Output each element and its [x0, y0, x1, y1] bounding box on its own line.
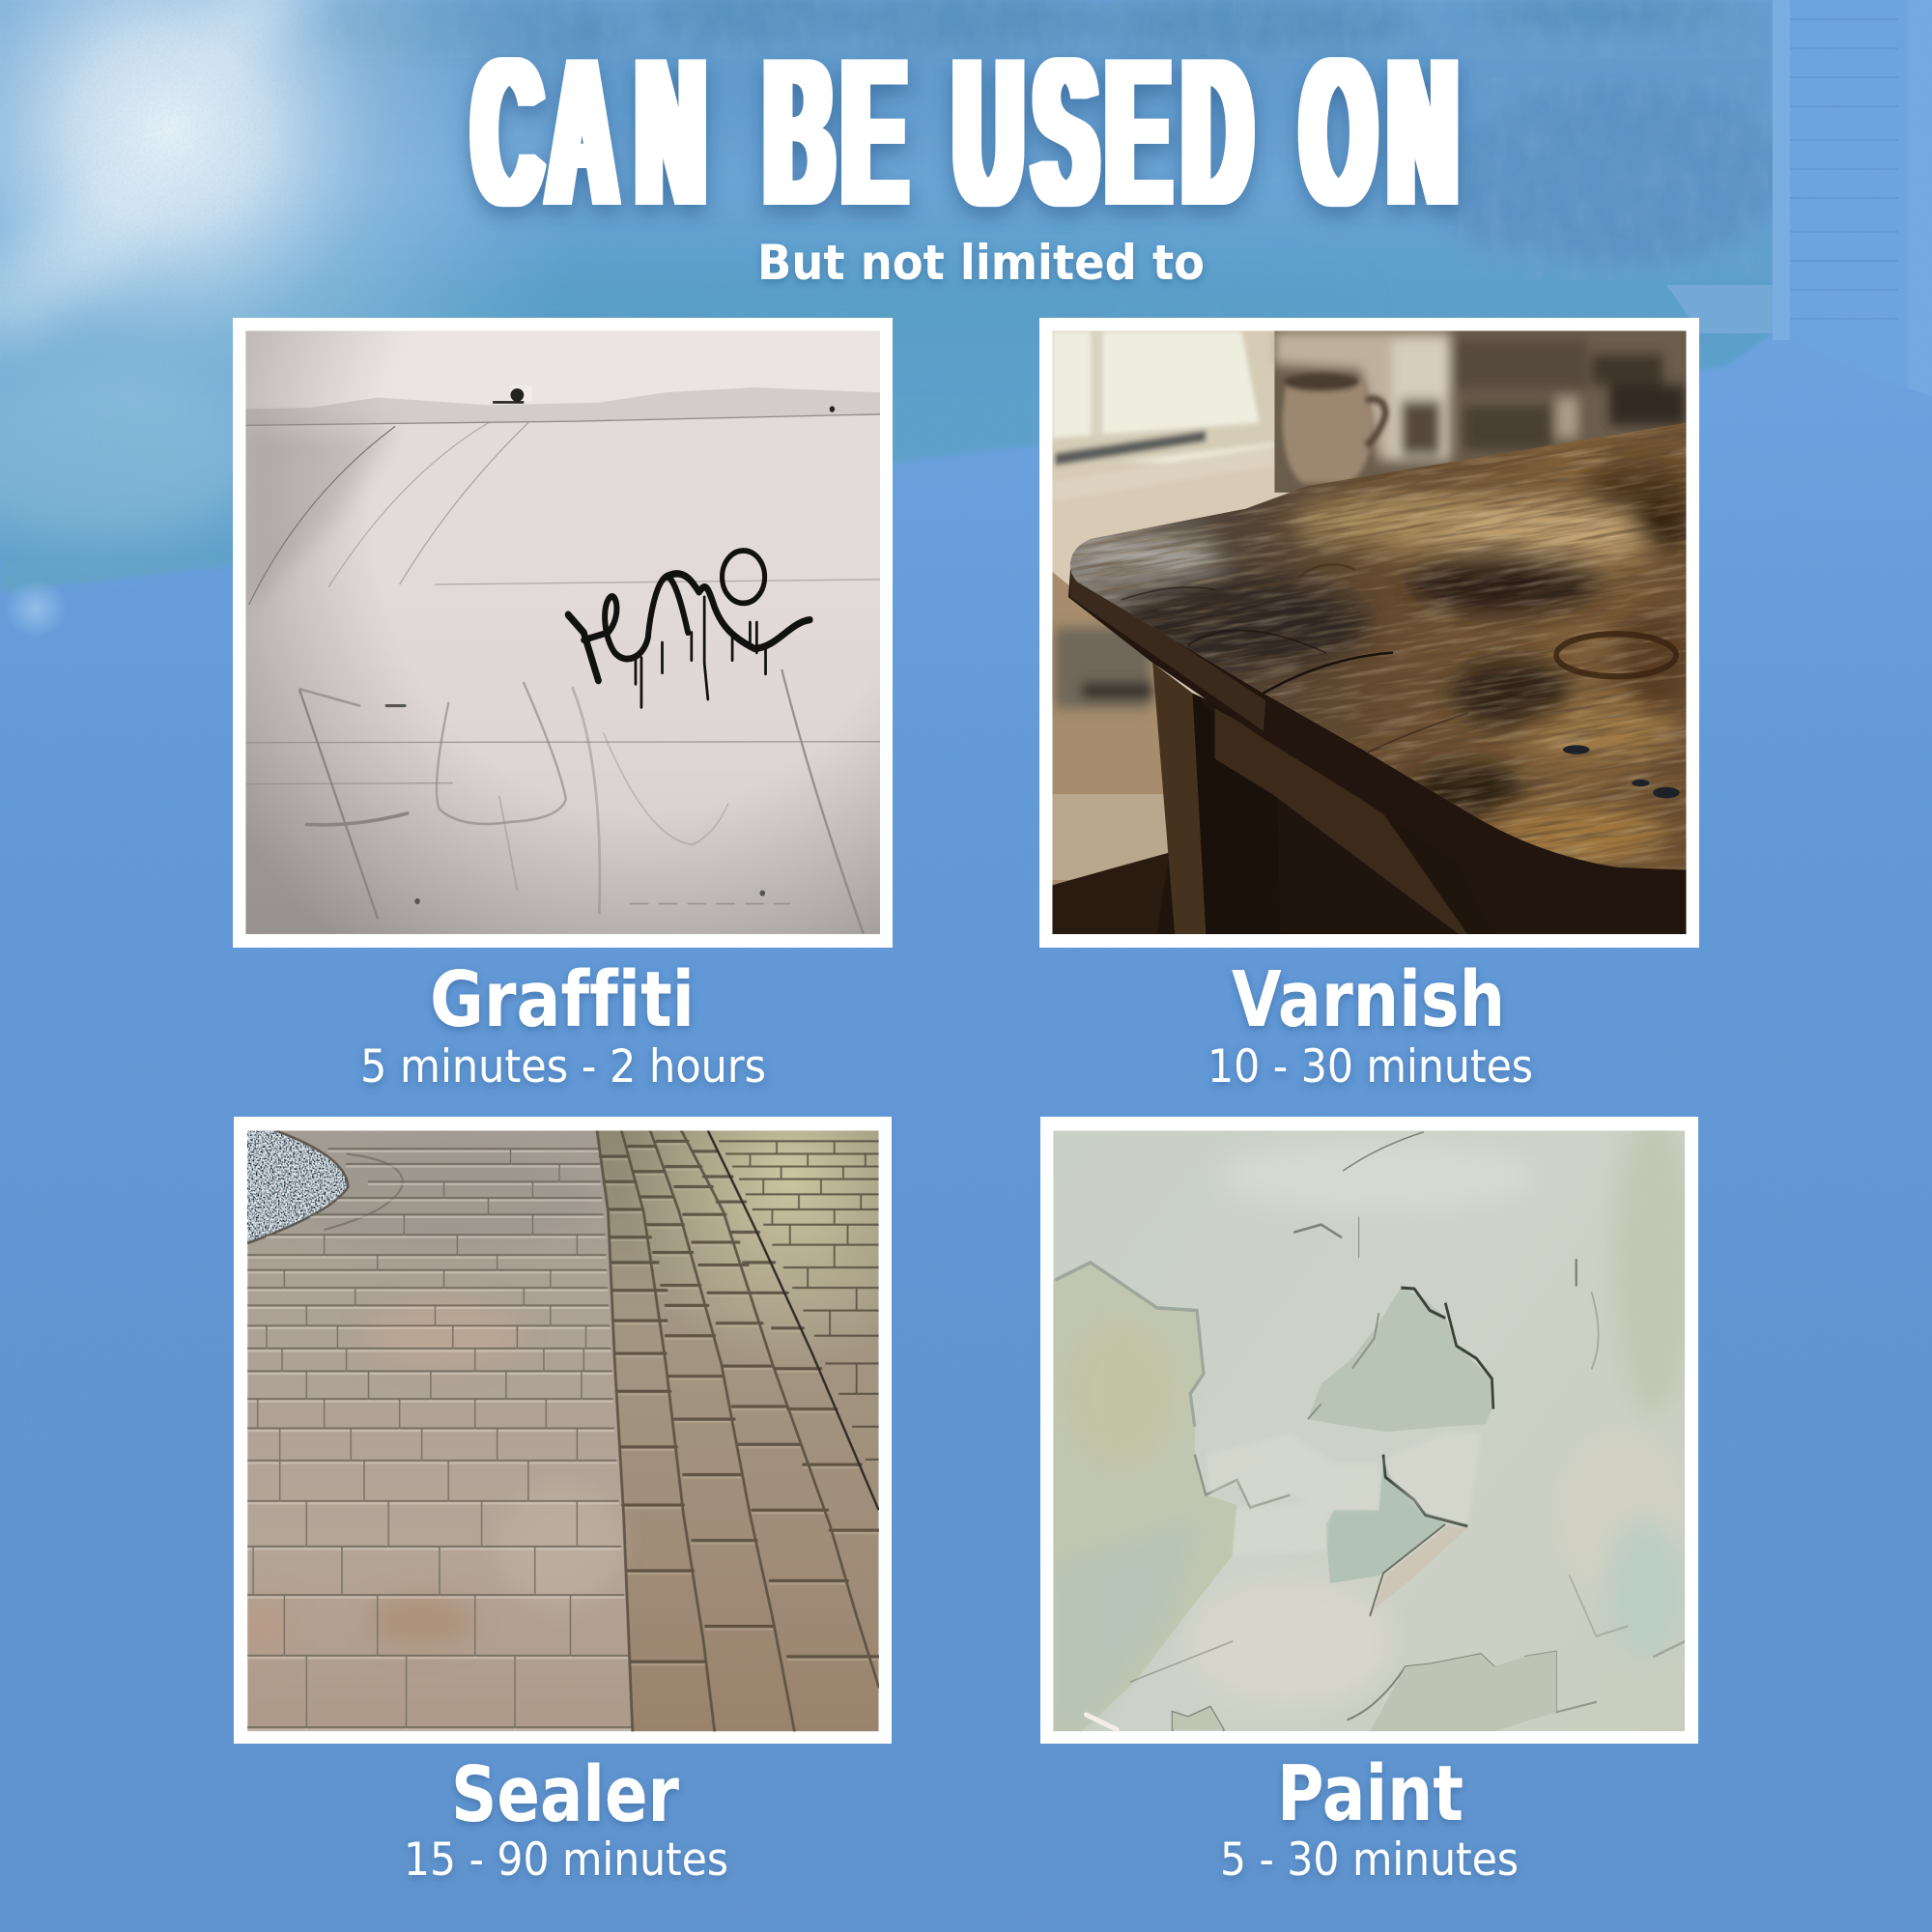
label: Paint: [1277, 1749, 1463, 1838]
right bricks: [719, 1141, 879, 1460]
foliage texture: [290, 0, 1768, 280]
photo frame: [234, 1117, 892, 1744]
paint flakes: [1206, 1435, 1481, 1555]
photo: peeling paint: [1053, 1111, 1693, 1731]
panel: graffiti: [233, 318, 893, 1094]
time range: 5 minutes - 2 hours: [360, 1040, 766, 1094]
under-table shadow: [1157, 693, 1556, 934]
title: ON: [1302, 15, 1457, 248]
legs and apron: [1152, 663, 1467, 934]
label: Varnish: [1232, 955, 1505, 1044]
central exposed area: [1308, 1288, 1493, 1432]
soft tone areas: [1188, 1111, 1693, 1702]
photo frame: [233, 318, 893, 948]
lawn tint: [0, 276, 1352, 541]
label: Sealer: [451, 1750, 679, 1839]
photo frame: [1040, 1117, 1698, 1744]
lower right exposed: [1370, 1652, 1556, 1731]
warm patches: [240, 1147, 621, 1657]
table side: [1068, 567, 1687, 934]
graffiti tag: [568, 551, 810, 707]
bushes: [1439, 82, 1787, 266]
photo: worn wooden table: [1052, 330, 1687, 934]
jug: [1282, 373, 1385, 483]
cobble joints: [597, 1130, 879, 1734]
title: BE: [765, 15, 905, 248]
title: [473, 15, 1457, 248]
time range: 10 - 30 minutes: [1208, 1040, 1533, 1094]
left brick joints: [247, 1149, 633, 1730]
time range: 15 - 90 minutes: [404, 1833, 728, 1887]
table top: [950, 299, 1814, 1026]
sun glare: [0, 0, 618, 638]
floor and stool: [1052, 572, 1467, 934]
title: USED: [954, 15, 1251, 248]
photo: stamped concrete pavers: [240, 1130, 879, 1734]
panel: paint: [1040, 1111, 1698, 1887]
distant trees: [299, 0, 1739, 63]
lower exposed area: [1325, 1455, 1467, 1616]
subtitle: But not limited to: [757, 235, 1205, 291]
exposed left area: [1053, 1263, 1291, 1731]
wood grain: [950, 299, 1814, 1026]
title: CAN: [473, 15, 704, 248]
panel: varnish: [1039, 318, 1699, 1088]
edge cracks: [1086, 1132, 1685, 1730]
time range: 5 - 30 minutes: [1220, 1833, 1519, 1887]
photo frame: [1039, 318, 1699, 948]
landscape area: [0, 0, 1773, 593]
small fixture: [414, 384, 835, 904]
window: [1052, 330, 1274, 502]
photo: graffiti on wall: [245, 330, 880, 934]
house corner: [1666, 0, 1932, 396]
expansion joint: [708, 1130, 879, 1510]
cobble band: [597, 1130, 879, 1731]
stone wall: [1274, 330, 1687, 493]
label: Graffiti: [430, 955, 695, 1044]
panel: sealer: [234, 1117, 892, 1887]
gravel patch: [247, 1130, 403, 1247]
